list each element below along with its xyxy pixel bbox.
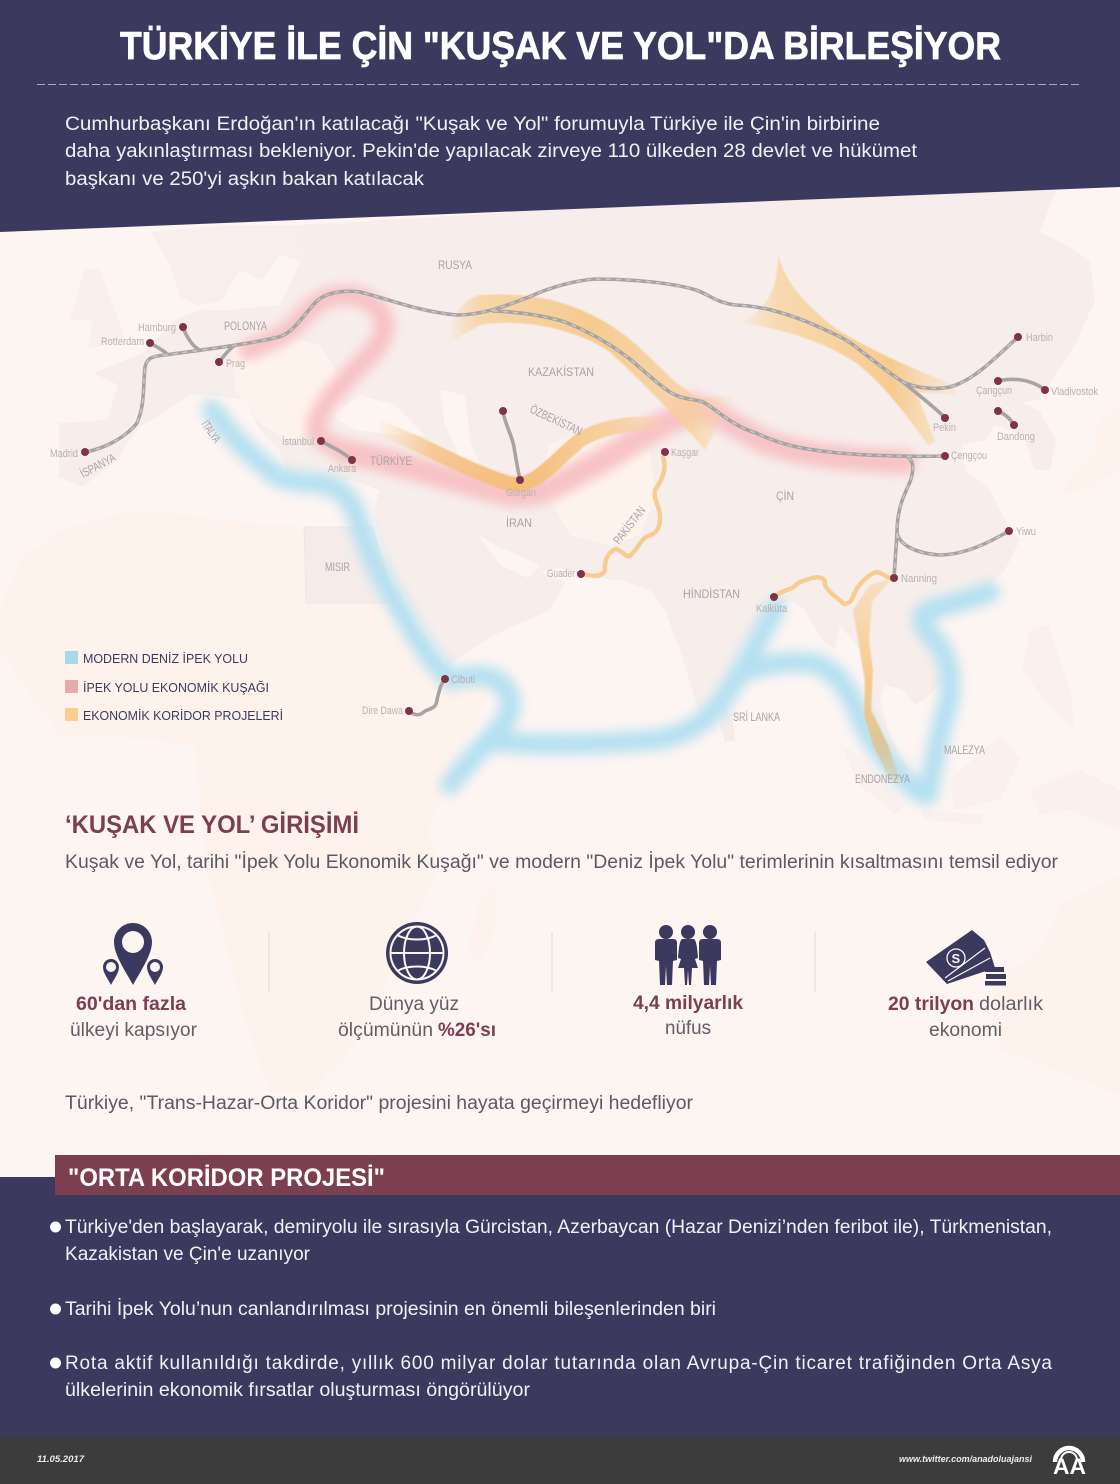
stat: countries	[70, 923, 198, 1041]
corridor band: türkiye to central asia	[378, 424, 670, 484]
city labels	[50, 322, 1098, 717]
land: italy	[200, 395, 255, 470]
icon: location pins	[103, 923, 163, 985]
country labels: ÖZBEKİSTAN	[528, 402, 584, 438]
country labels: MALEZYA	[944, 743, 985, 757]
twitter url: www.twitter.com/anadoluajansi	[899, 1454, 1032, 1465]
country labels: TÜRKİYE	[370, 454, 412, 468]
city labels: Gürgan	[506, 487, 536, 499]
section heading: initiative: ‘KUŞAK VE YOL’ GİRİŞİMİ	[65, 811, 359, 839]
country labels: İRAN	[506, 516, 532, 530]
city labels: Ankara	[328, 463, 357, 475]
bullet list	[50, 1217, 1052, 1401]
city markers	[81, 323, 1049, 715]
map legend: MODERN DENİZ İPEK YOLU	[83, 651, 248, 666]
map legend: İPEK YOLU EKONOMİK KUŞAĞI	[83, 680, 269, 695]
country labels: MISIR	[325, 560, 350, 574]
city labels: Harbin	[1026, 332, 1053, 344]
corridor intro sentence: Türkiye, "Trans-Hazar-Orta Koridor" projesini hayata geçirmeyi hedefliyor	[65, 1093, 694, 1114]
stat: economy: ekonomi	[929, 1020, 1002, 1041]
city labels: Rotterdam	[101, 336, 144, 348]
city labels: Prag	[226, 358, 245, 370]
bullet list: Kazakistan ve Çin'e uzanıyor	[65, 1244, 311, 1265]
land: japan	[1060, 405, 1120, 495]
country labels: ÇİN	[776, 489, 794, 503]
land: britain	[70, 268, 125, 350]
icon: money	[926, 930, 1006, 986]
stat: economy: dolarlık	[979, 994, 1044, 1015]
stat: world area	[338, 922, 496, 1041]
country labels: SRİ LANKA	[733, 710, 780, 724]
city labels: Çengçou	[951, 450, 987, 462]
initiative description: Kuşak ve Yol, tarihi "İpek Yolu Ekonomik Kuşağı" ve modern "Deniz İpek Yolu" terimlerinin kısaltmasını temsil ediyor	[65, 852, 1059, 873]
city labels: Vladivostok	[1051, 386, 1098, 398]
city labels: Çangçun	[976, 385, 1012, 397]
intro text: başkanı ve 250'yi aşkın bakan katılacak	[65, 169, 425, 190]
city labels: Yiwu	[1016, 526, 1036, 538]
country labels: ENDONEZYA	[855, 772, 910, 786]
footer	[0, 1437, 1120, 1484]
land: eastern europe and central asia tint	[232, 335, 655, 545]
bullet list: Türkiye'den başlayarak, demiryolu ile sırasıyla Gürcistan, Azerbaycan (Hazar Denizi’nden feribot ile), Türkmenistan,	[65, 1217, 1052, 1238]
title: TÜRKİYE İLE ÇİN "KUŞAK VE YOL"DA BİRLEŞİYOR	[120, 25, 1001, 68]
silk road economic belt routes	[248, 295, 905, 495]
land: sumatra and borneo	[840, 735, 1120, 830]
corridor band: nanning to singapore	[853, 578, 900, 782]
banner: orta koridor projesi: "ORTA KORİDOR PROJESİ"	[68, 1164, 385, 1192]
maritime silk road routes	[212, 410, 990, 795]
bullet list: Rota aktif kullanıldığı takdirde, yıllık 600 milyar dolar tutarında olan Avrupa-Çin ticaret trafiğinden Orta Asya	[65, 1353, 1052, 1374]
country labels: HİNDİSTAN	[683, 587, 740, 601]
city labels: Madrid	[50, 448, 78, 460]
panel: middle corridor project	[0, 1155, 1120, 1437]
stat: world area: ölçümünün	[338, 1020, 433, 1041]
map legend	[65, 651, 283, 723]
country labels: RUSYA	[438, 258, 472, 272]
city labels: Kalküta	[756, 603, 788, 615]
city labels: Cibuti	[451, 674, 475, 686]
bullet list: Tarihi İpek Yolu’nun canlandırılması projesinin en önemli bileşenlerinden biri	[65, 1299, 716, 1320]
separators	[269, 932, 815, 992]
stat: world area: Dünya yüz	[369, 994, 459, 1015]
stat: world area: %26'sı	[438, 1020, 496, 1041]
city labels: Guader	[547, 568, 575, 580]
header panel	[0, 0, 1120, 232]
economic corridor bands	[378, 255, 958, 782]
seas	[330, 390, 540, 578]
stat: population	[633, 925, 743, 1039]
bullet list: ülkelerinin ekonomik fırsatlar oluşturması öngörülüyor	[65, 1380, 531, 1401]
country labels	[78, 258, 985, 786]
stat: economy	[888, 930, 1044, 1041]
city labels: Nanning	[901, 573, 937, 585]
rail sleepers	[86, 279, 1018, 578]
icon: globe	[386, 922, 448, 984]
icon: people	[655, 925, 721, 985]
city labels: Kaşgar	[671, 447, 699, 459]
land: africa	[0, 510, 495, 1092]
country labels: İTALYA	[199, 418, 224, 445]
city labels: Pekin	[933, 422, 956, 434]
map legend: EKONOMİK KORİDOR PROJELERİ	[83, 708, 283, 723]
city labels: Hamburg	[138, 322, 176, 334]
corridor line: kalküta to nanning	[776, 572, 893, 604]
banner: orta koridor projesi	[55, 1155, 1120, 1195]
logo: anadolu agency: AA	[1053, 1454, 1086, 1479]
city labels: Dandong	[997, 431, 1035, 443]
railway lines	[86, 279, 1045, 715]
corridor band: mongolia and china	[735, 255, 958, 445]
corridor line: guader to kaşgar	[583, 458, 664, 576]
date: 11.05.2017	[37, 1454, 85, 1465]
stat: population: 4,4 milyarlık	[633, 993, 743, 1014]
land: philippines	[1022, 625, 1075, 730]
country labels: İSPANYA	[78, 450, 118, 481]
world map base	[0, 180, 1120, 1095]
country labels: KAZAKİSTAN	[528, 365, 594, 379]
country labels: POLONYA	[224, 319, 267, 333]
intro text	[65, 114, 918, 190]
land: scandinavia	[150, 225, 305, 305]
land: eurasia	[59, 180, 1095, 770]
country labels: PAKİSTAN	[610, 504, 648, 547]
land: sri lanka	[720, 705, 735, 742]
stat: countries: ülkeyi kapsıyor	[70, 1020, 198, 1041]
icon: money: S	[952, 951, 960, 966]
intro text: daha yakınlaştırması bekleniyor. Pekin'de yapılacak zirveye 110 ülkeden 28 devlet ve hükümet	[65, 141, 918, 162]
stat: population: nüfus	[665, 1018, 711, 1039]
stat: countries: 60'dan fazla	[76, 994, 186, 1015]
land: egypt	[304, 527, 395, 603]
land: australia	[992, 875, 1120, 1095]
stat: economy: 20 trilyon	[888, 994, 974, 1015]
corridor band: northern central asia	[445, 294, 735, 450]
city labels: Dire Dawa	[362, 705, 404, 717]
land: madagascar	[468, 885, 498, 965]
city labels: İstanbul	[282, 435, 314, 448]
intro text: Cumhurbaşkanı Erdoğan'ın katılacağı "Kuşak ve Yol" forumuyla Türkiye ile Çin'in birbirine	[65, 114, 880, 135]
